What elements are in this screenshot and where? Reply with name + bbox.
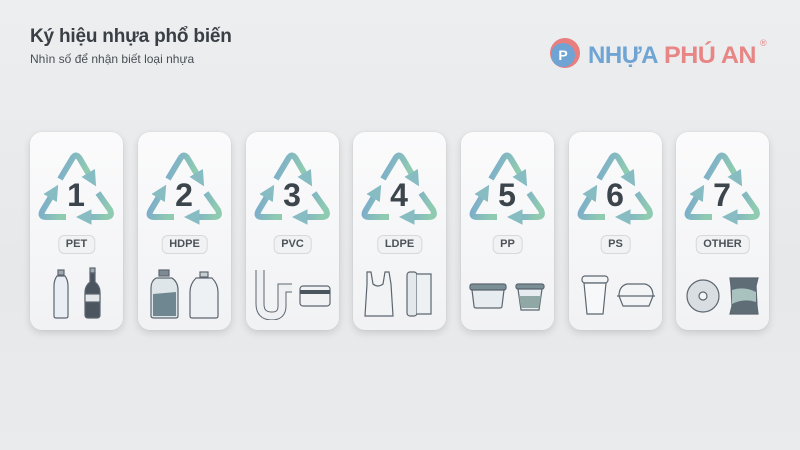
icon: disc and snack bag bbox=[686, 277, 759, 315]
icon: recycle 1 bbox=[38, 152, 114, 225]
logo: NHỰA bbox=[588, 42, 658, 69]
icon: recycle 7: 7 bbox=[713, 177, 731, 213]
card 7: OTHER bbox=[676, 132, 769, 330]
icon: recycle 2: 2 bbox=[175, 177, 193, 213]
icon: recycle 3: 3 bbox=[283, 177, 301, 213]
icon: recycle 6 bbox=[578, 152, 653, 225]
icon: bag and wrap bbox=[364, 271, 432, 317]
icon: recycle 4 bbox=[362, 152, 437, 225]
card 2: HDPE bbox=[138, 132, 231, 330]
icon: recycle 6: 6 bbox=[606, 177, 624, 213]
icon: bottles bbox=[53, 267, 101, 319]
icon: recycle 5: 5 bbox=[498, 177, 516, 213]
label PP bbox=[492, 235, 523, 254]
label LDPE: LDPE bbox=[385, 238, 414, 250]
icon: recycle 5 bbox=[470, 152, 545, 225]
subtitle: Nhìn số để nhận biết loại nhựa bbox=[30, 52, 194, 66]
icon: containers bbox=[469, 283, 545, 311]
label PET bbox=[58, 235, 95, 254]
icon: recycle 2 bbox=[146, 152, 222, 225]
icon: jugs bbox=[150, 269, 219, 319]
icon: cup and foam box bbox=[581, 275, 655, 315]
card 3: PVC bbox=[246, 132, 339, 330]
label PS bbox=[600, 235, 631, 254]
logo: ® bbox=[760, 38, 767, 48]
logo: PHÚ AN bbox=[664, 41, 756, 69]
icon: recycle 7 bbox=[684, 152, 760, 225]
label PVC bbox=[273, 235, 312, 254]
label LDPE bbox=[377, 235, 422, 254]
label HDPE: HDPE bbox=[169, 238, 200, 250]
label OTHER bbox=[695, 235, 750, 254]
label PP: PP bbox=[500, 238, 515, 250]
icon: recycle 3 bbox=[254, 152, 330, 225]
card 6: PS bbox=[569, 132, 662, 330]
label HDPE bbox=[161, 235, 208, 254]
icon: recycle 4: 4 bbox=[390, 177, 408, 213]
label PET: PET bbox=[66, 238, 87, 250]
label PS: PS bbox=[608, 238, 623, 250]
logo: P bbox=[558, 47, 568, 63]
logo bbox=[550, 38, 767, 69]
card 1: PET bbox=[30, 132, 123, 330]
label OTHER: OTHER bbox=[703, 238, 742, 250]
title: Ký hiệu nhựa phổ biến bbox=[30, 26, 232, 47]
icon: recycle 1: 1 bbox=[67, 177, 85, 213]
icon: pipe and card bbox=[256, 270, 331, 320]
card 4: LDPE bbox=[353, 132, 446, 330]
card 5: PP bbox=[461, 132, 554, 330]
label PVC: PVC bbox=[281, 238, 304, 250]
